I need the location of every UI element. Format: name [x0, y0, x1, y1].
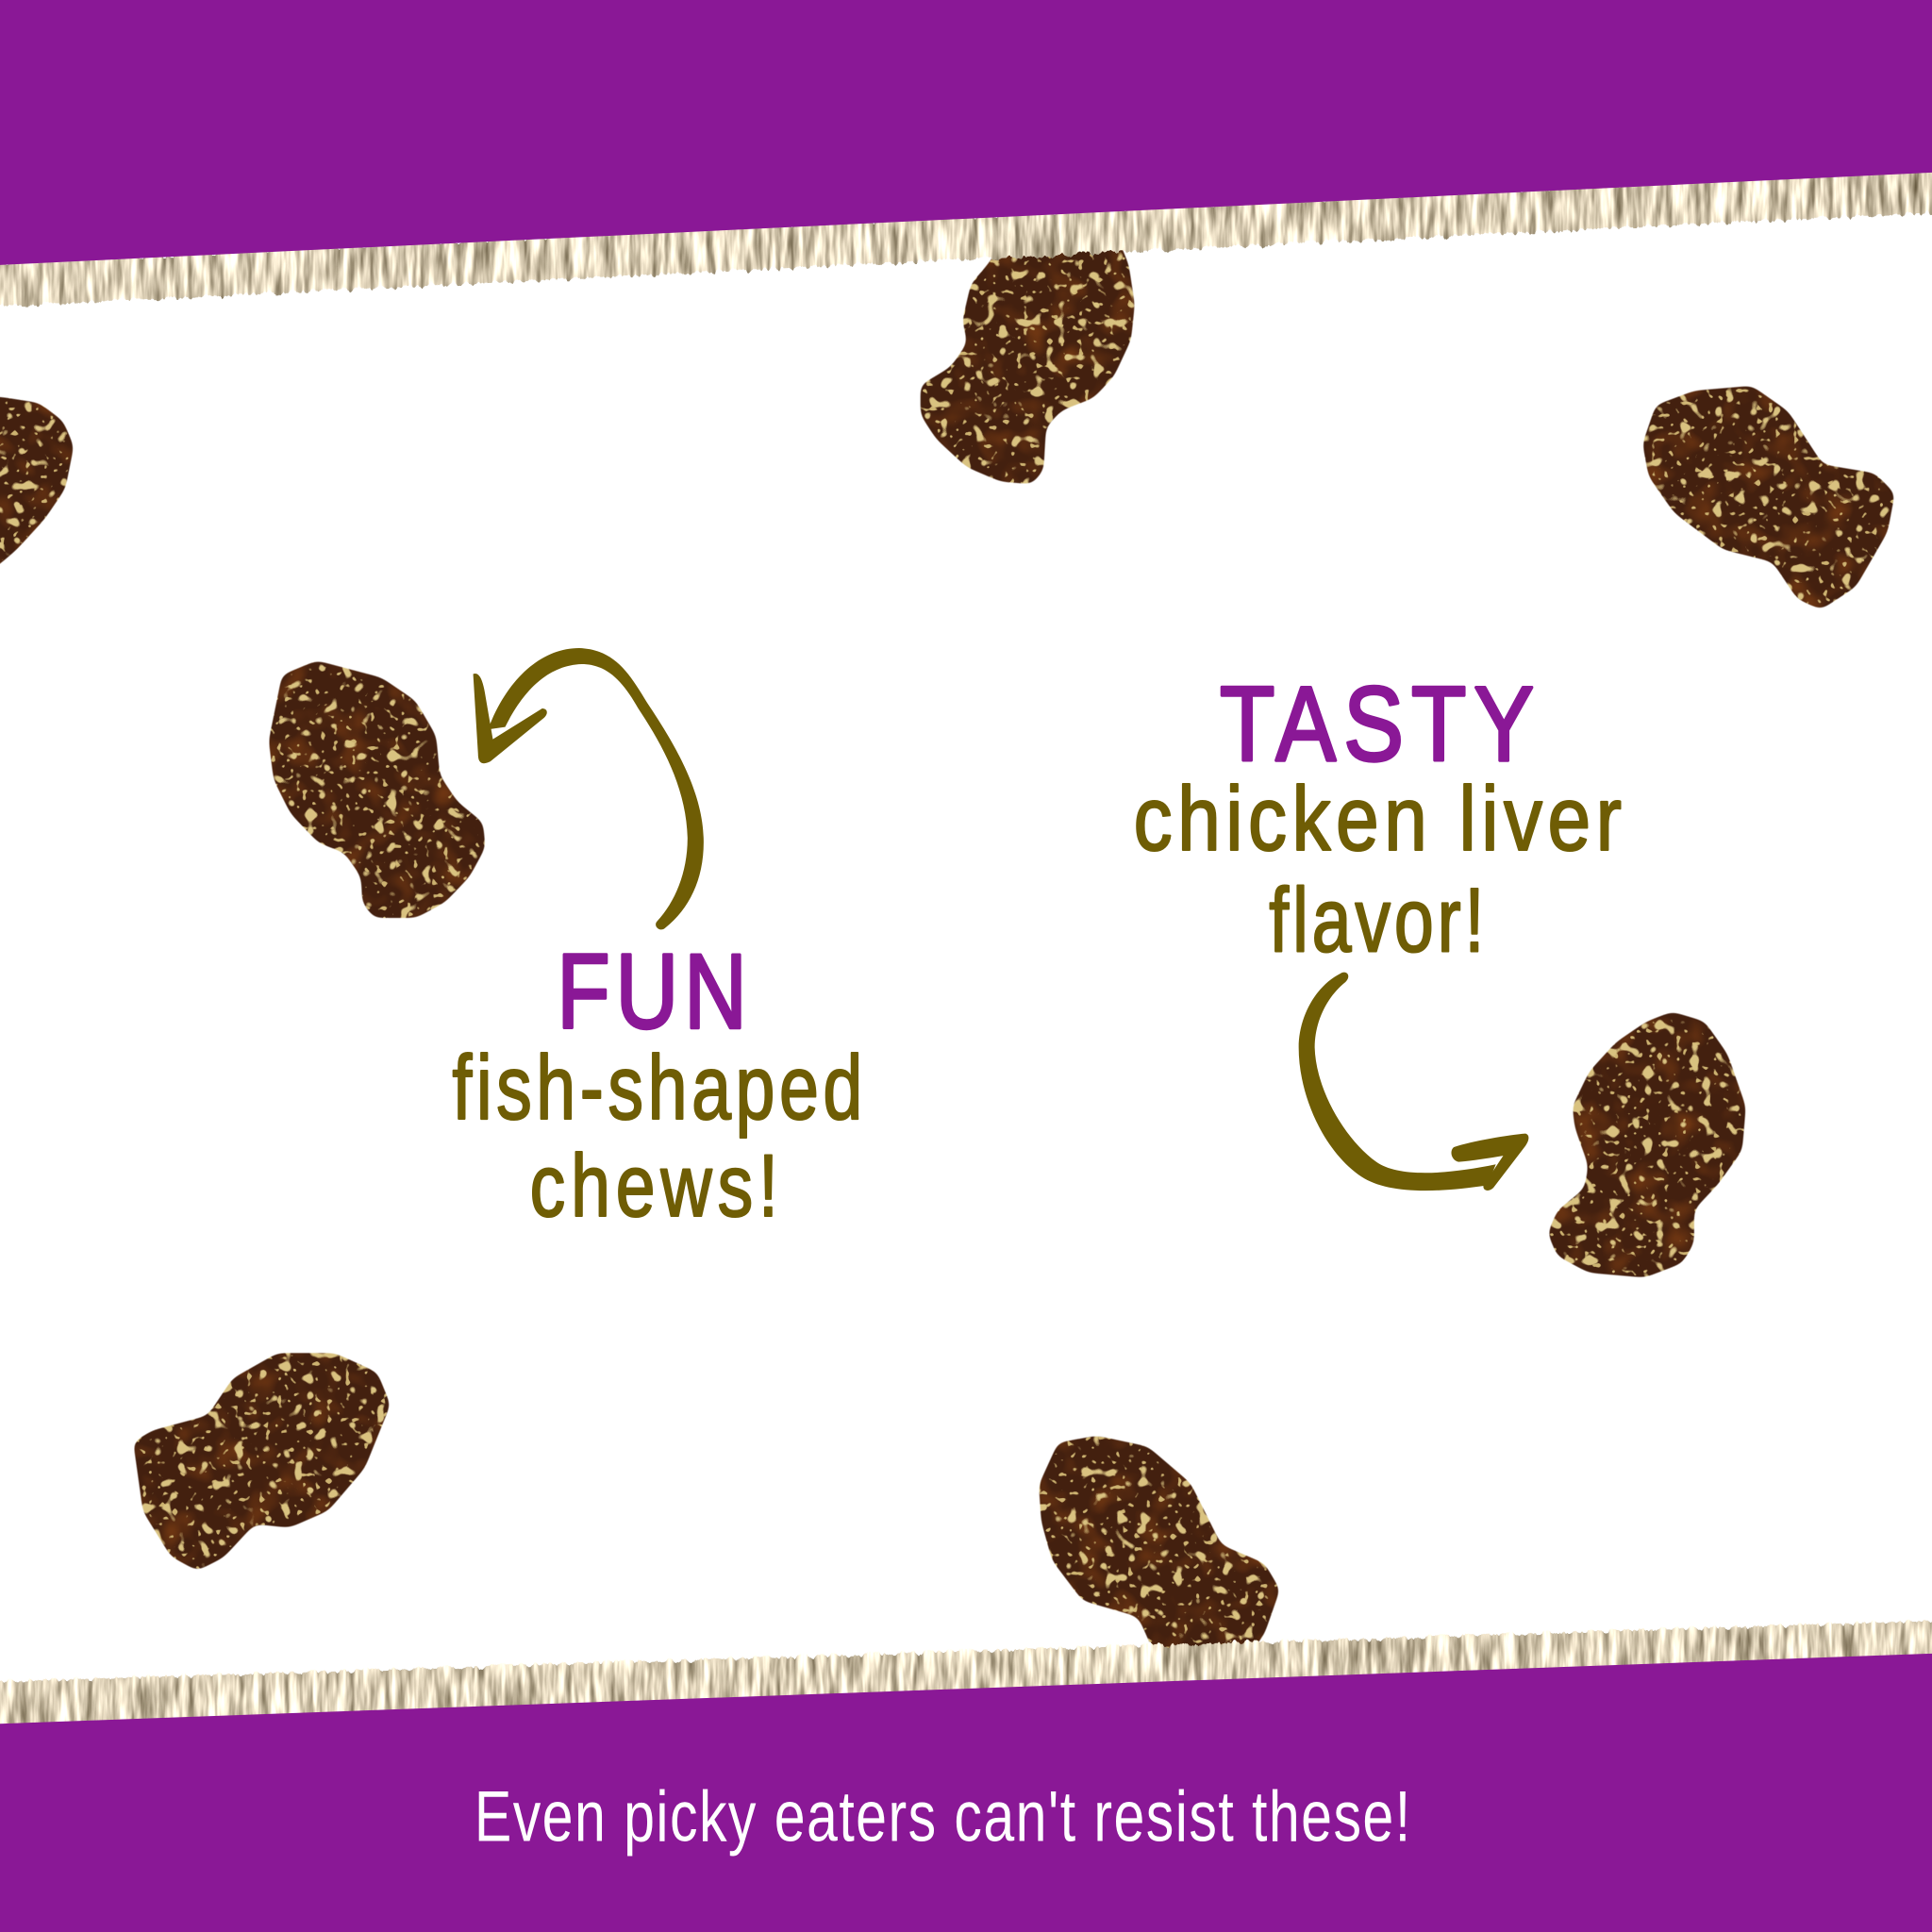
chew: lower middle, resting on fringe [1038, 1434, 1281, 1659]
chew: pointed to by fun arrow [267, 659, 487, 919]
chew: pointed to by tasty arrow [1546, 1010, 1747, 1279]
arrow: to fun chew [474, 648, 704, 929]
bottom tagline: Even picky eaters can't resist these! [475, 1777, 1410, 1857]
chew: lower left [132, 1352, 391, 1573]
top fringe [0, 169, 1932, 307]
bottom purple band [0, 1654, 1932, 1932]
chew: cut off at left edge [0, 395, 75, 581]
label: tasty: TASTY [1220, 666, 1534, 784]
label: chews!: chews! [530, 1137, 778, 1236]
label: chicken liver: chicken liver [1134, 769, 1622, 871]
top purple band [0, 0, 1932, 265]
bottom fringe [0, 1621, 1932, 1727]
label: fish-shaped: fish-shaped [452, 1038, 862, 1139]
chew: top, tucked under fringe [919, 232, 1136, 486]
arrow: to tasty chew [1299, 973, 1528, 1191]
label: flavor!: flavor! [1269, 870, 1485, 972]
chew: upper right [1641, 385, 1896, 611]
label: fun: FUN [557, 932, 747, 1050]
